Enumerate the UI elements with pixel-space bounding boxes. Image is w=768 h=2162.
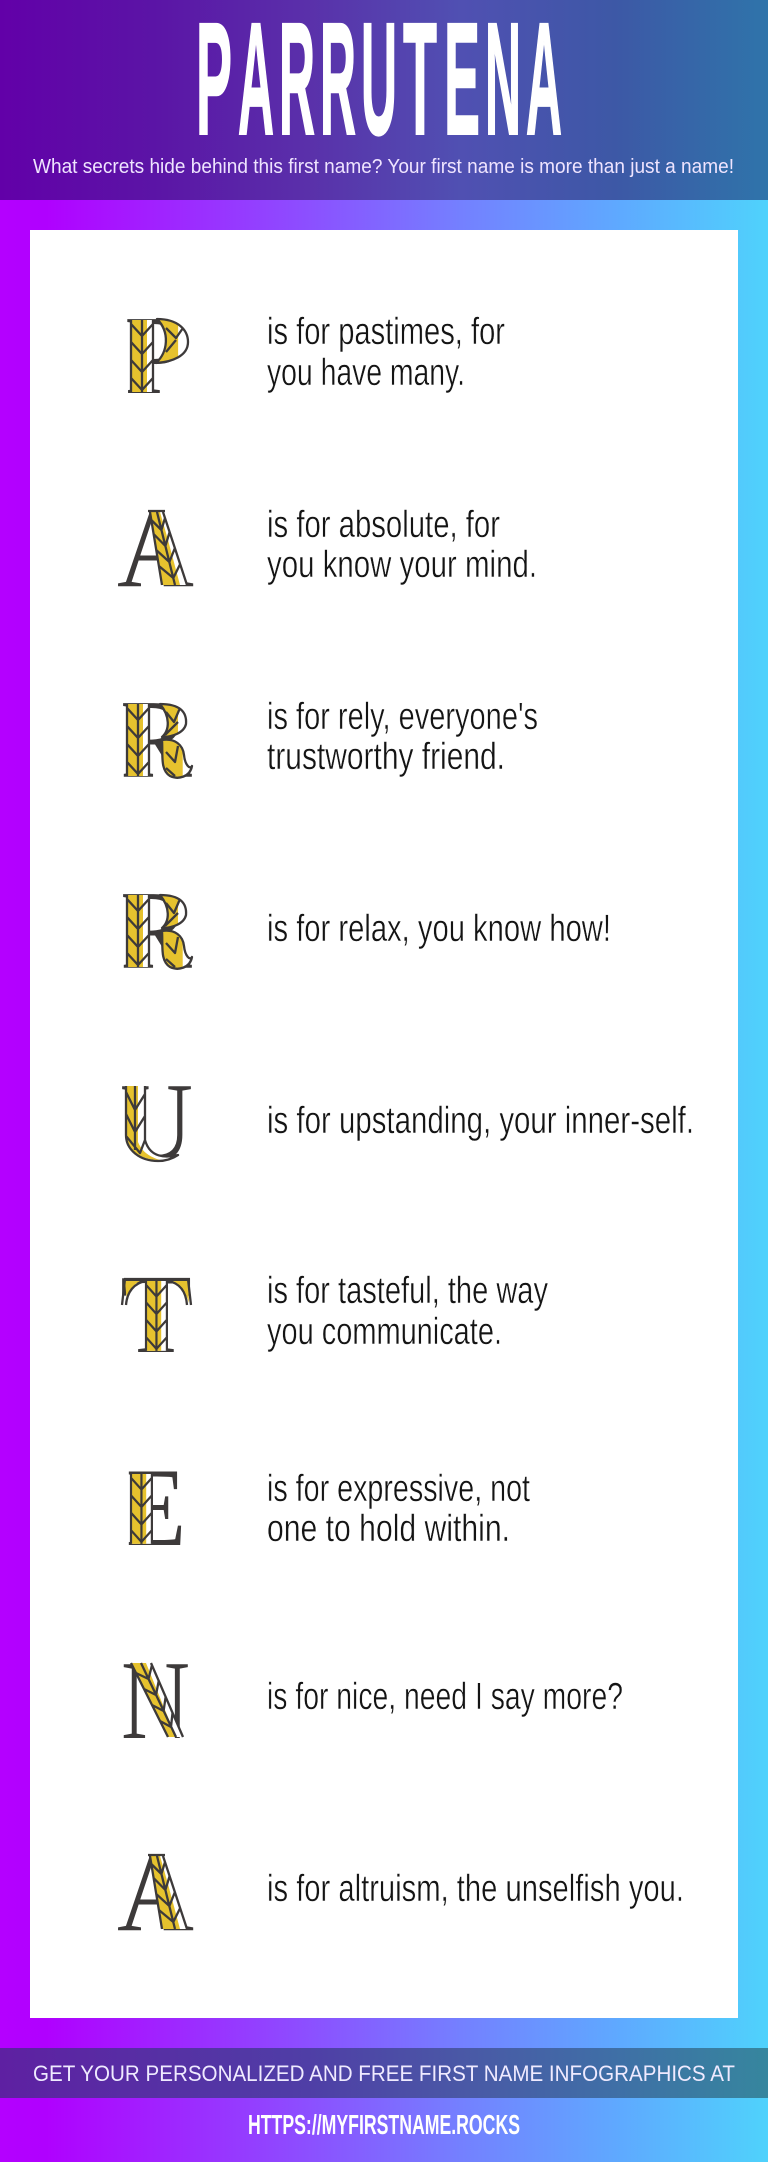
icon: letter A: A xyxy=(117,487,194,611)
text: E line: one to hold within. xyxy=(267,1508,510,1550)
footer band xyxy=(0,2048,768,2098)
icon: letter U: U xyxy=(120,1061,193,1185)
text: E line xyxy=(267,1468,530,1550)
text: R line: trustworthy friend. xyxy=(267,736,505,778)
title xyxy=(196,0,562,168)
icon: letter R: R xyxy=(120,869,192,993)
text: P line xyxy=(267,311,505,394)
icon: letter A: A xyxy=(117,1831,194,1955)
subtitle: What secrets hide behind this first name? Your first name is more than just a name! xyxy=(33,155,734,178)
row: A xyxy=(117,487,537,611)
text: P line: you have many. xyxy=(267,352,465,394)
text: T line: you communicate. xyxy=(267,1311,502,1353)
icon: letter P: P xyxy=(124,294,188,418)
row: R xyxy=(120,678,538,802)
text: E line: is for expressive, not xyxy=(267,1468,530,1510)
text: A line: is for absolute, for xyxy=(267,504,500,546)
text: A line: you know your mind. xyxy=(267,544,537,586)
row: P xyxy=(124,294,505,418)
icon: letter E: E xyxy=(126,1446,186,1570)
text: P line: is for pastimes, for xyxy=(267,311,505,353)
row: U xyxy=(120,1061,694,1185)
icon: letter T: T xyxy=(120,1253,192,1377)
text: T line xyxy=(267,1270,548,1353)
row: T xyxy=(120,1253,548,1377)
icon: letter N: N xyxy=(121,1639,190,1763)
text: R line: is for relax, you know how! xyxy=(267,908,611,950)
row: A second xyxy=(117,1831,684,1955)
row: E xyxy=(126,1446,530,1570)
panel: letter list xyxy=(30,230,738,2018)
text: A line xyxy=(267,504,537,586)
text: T line: is for tasteful, the way xyxy=(267,1270,548,1312)
footer call to action: GET YOUR PERSONALIZED AND FREE FIRST NAME INFOGRAPHICS AT xyxy=(33,2061,735,2086)
text: N line: is for nice, need I say more? xyxy=(267,1676,623,1718)
row: R second xyxy=(120,869,611,993)
footer url: HTTPS://MYFIRSTNAME.ROCKS xyxy=(248,2109,520,2140)
header banner xyxy=(0,0,768,200)
text: R line: is for rely, everyone's xyxy=(267,696,538,738)
row: N xyxy=(121,1639,623,1763)
icon: letter R: R xyxy=(120,678,192,802)
text: R line xyxy=(267,696,538,778)
